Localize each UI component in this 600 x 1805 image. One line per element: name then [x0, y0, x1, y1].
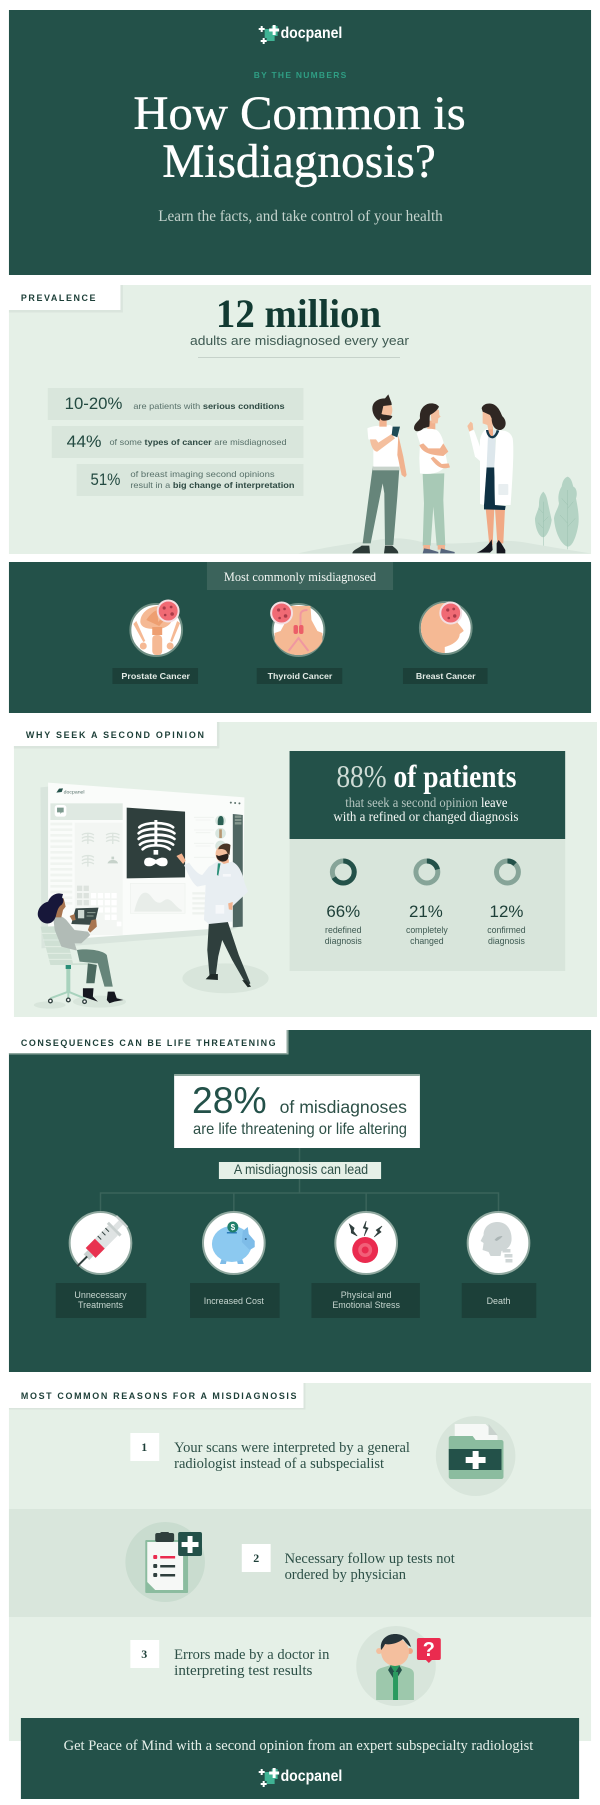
- label: physical and emotional stress: [311, 1283, 420, 1318]
- stat: 21 percent: [406, 902, 448, 946]
- label: prostate cancer: [112, 668, 198, 684]
- reason 3: 3: [141, 1647, 147, 1661]
- label: breast cancer: Breast Cancer: [416, 671, 476, 681]
- callout: 28 percent: [174, 1074, 420, 1148]
- reason 3: interpreting test results: [174, 1663, 313, 1679]
- stat: 51%: result in a big change of interpretation: [130, 480, 295, 490]
- panel: why seek a second opinion: [0, 721, 597, 1017]
- illustration: doctor presenting: [176, 843, 269, 993]
- reason 2: Necessary follow up tests not: [285, 1551, 455, 1567]
- panel: reasons: [0, 1382, 591, 1741]
- label: increased cost: Increased Cost: [204, 1296, 264, 1306]
- stat: 12 percent: diagnosis: [488, 936, 526, 946]
- illustration: patient on chair: [34, 893, 126, 1009]
- illustration: ground: [298, 538, 591, 553]
- reason 1: [130, 1433, 410, 1472]
- sub-heading: [207, 562, 393, 590]
- label: thyroid cancer: Thyroid Cancer: [268, 671, 333, 681]
- footer logo: docpanel: [281, 1768, 342, 1785]
- label: thyroid cancer: [257, 668, 342, 684]
- reason 2: ordered by physician: [285, 1567, 406, 1583]
- illustration: trees: [535, 477, 579, 549]
- section tab: WHY SEEK A SECOND OPINION: [26, 730, 204, 740]
- illustration: pregnant woman: [414, 403, 455, 553]
- connector lines: [100, 1148, 499, 1212]
- stat: 66 percent: 66%: [326, 902, 360, 921]
- panel: prevalence: [0, 284, 591, 554]
- label: death: Death: [487, 1296, 510, 1306]
- stat: 10-20%: are patients with serious conditions: [133, 401, 285, 411]
- reason 1: Your scans were interpreted by a general: [174, 1440, 410, 1456]
- label: death: [462, 1283, 536, 1318]
- label: physical and emotional stress: Emotional Stress: [332, 1300, 400, 1310]
- illustration: man: [352, 394, 407, 553]
- stat card: breakdown: [290, 839, 565, 971]
- section tab: CONSEQUENCES CAN BE LIFE THREATENING: [21, 1038, 276, 1048]
- stat: 66 percent: [325, 902, 362, 946]
- section tab: MOST COMMON REASONS FOR A MISDIAGNOSIS: [21, 1391, 297, 1401]
- sub-heading: Most commonly misdiagnosed: [224, 569, 377, 584]
- label: physical and emotional stress: Physical and: [341, 1290, 392, 1300]
- reason 2: [242, 1544, 455, 1583]
- eyebrow: BY THE NUMBERS: [254, 70, 347, 80]
- subtitle: Learn the facts, and take control of your health: [158, 208, 443, 225]
- big number: 12 million: [216, 291, 381, 336]
- panel: consequences: [0, 1029, 591, 1372]
- stat: 12 percent: confirmed: [487, 925, 526, 935]
- title: [133, 87, 466, 188]
- icon: stress target: [335, 1212, 397, 1274]
- reason 1: 1: [141, 1440, 147, 1454]
- stat: 21 percent: 21%: [409, 902, 443, 921]
- icon: doctor with question: ?: [423, 1639, 435, 1661]
- lead-in label: A misdiagnosis can lead: [234, 1162, 368, 1177]
- icon: prostate cancer: [130, 600, 182, 656]
- stat: 44%: 44%: [67, 432, 101, 451]
- label: breast cancer: [403, 668, 488, 684]
- logo: docpanel: [281, 25, 342, 42]
- stat: 44%: [52, 426, 303, 458]
- section tab: [0, 721, 219, 748]
- icon: thyroid cancer: [271, 602, 324, 656]
- stat: 51%: of breast imaging second opinions: [130, 469, 275, 479]
- stat: 21 percent: completely: [406, 925, 448, 935]
- label: unnecessary treatments: Treatments: [78, 1300, 123, 1310]
- illustration: screen: docpanel: [64, 790, 85, 796]
- icon: syringe: [70, 1212, 131, 1274]
- donut: 21 percent: [416, 861, 438, 883]
- illustration: doctor: [467, 404, 513, 553]
- stat: 66 percent: diagnosis: [325, 936, 362, 946]
- icon: clipboard: [125, 1522, 205, 1602]
- donut: 12 percent: [497, 861, 518, 883]
- stat: 12 percent: 12%: [490, 902, 523, 921]
- panel: header: [9, 10, 591, 275]
- panel: footer call to action: [21, 1718, 579, 1799]
- icon: doctor with question: [356, 1626, 441, 1706]
- reason 3: Errors made by a doctor in: [174, 1647, 329, 1663]
- callout: 28 percent: 28%: [192, 1080, 267, 1121]
- icon: piggy bank: [203, 1212, 265, 1274]
- section tab: [0, 284, 123, 312]
- footer logo: [259, 1768, 342, 1787]
- title: How Common is: [133, 87, 466, 140]
- stat: 51%: [77, 464, 303, 496]
- section tab: [0, 1029, 289, 1054]
- reason 3: [130, 1640, 329, 1679]
- label: unnecessary treatments: Unnecessary: [74, 1290, 127, 1300]
- reason 2: 2: [253, 1551, 259, 1565]
- stat: 10-20%: [48, 388, 303, 420]
- label: prostate cancer: Prostate Cancer: [121, 671, 191, 681]
- panel: most commonly misdiagnosed: [9, 562, 591, 713]
- stat card: 88 percent: that seek a second opinion leave: [345, 795, 507, 810]
- label: unnecessary treatments: [56, 1283, 146, 1318]
- title: Misdiagnosis?: [162, 135, 436, 188]
- icon: skull: [468, 1212, 529, 1274]
- icon: piggy bank: $: [231, 1223, 236, 1232]
- stat: 21 percent: changed: [410, 936, 444, 946]
- stat: 10-20%: 10-20%: [65, 394, 122, 413]
- stat card: 88 percent: 88% of patients: [336, 759, 516, 794]
- donut: 66 percent: [332, 861, 354, 883]
- callout: 28 percent: are life threatening or life altering: [193, 1121, 407, 1138]
- reason 1: radiologist instead of a subspecialist: [174, 1456, 384, 1472]
- callout: 28 percent: of misdiagnoses: [280, 1097, 407, 1117]
- stat: 66 percent: redefined: [325, 925, 362, 935]
- subheading: adults are misdiagnosed every year: [190, 334, 409, 348]
- stat: 51%: 51%: [91, 470, 120, 489]
- label: increased cost: [190, 1283, 280, 1318]
- illustration: x-ray: [127, 808, 185, 878]
- panel: footer call to action: Get Peace of Mind with a second opinion from an expert subspecialty radiologist: [64, 1738, 533, 1754]
- stat: 12 percent: [487, 902, 526, 946]
- icon: medical folder: [436, 1416, 515, 1496]
- stat: 44%: of some types of cancer are misdiagnosed: [109, 437, 287, 447]
- section tab: [0, 1382, 305, 1410]
- section tab: PREVALENCE: [21, 293, 96, 303]
- stat card: 88 percent: with a refined or changed diagnosis: [333, 809, 518, 824]
- stat card: 88 percent: [290, 751, 565, 839]
- illustration: screen: [40, 783, 244, 948]
- icon: breast cancer: [420, 602, 472, 654]
- logo: [259, 25, 342, 44]
